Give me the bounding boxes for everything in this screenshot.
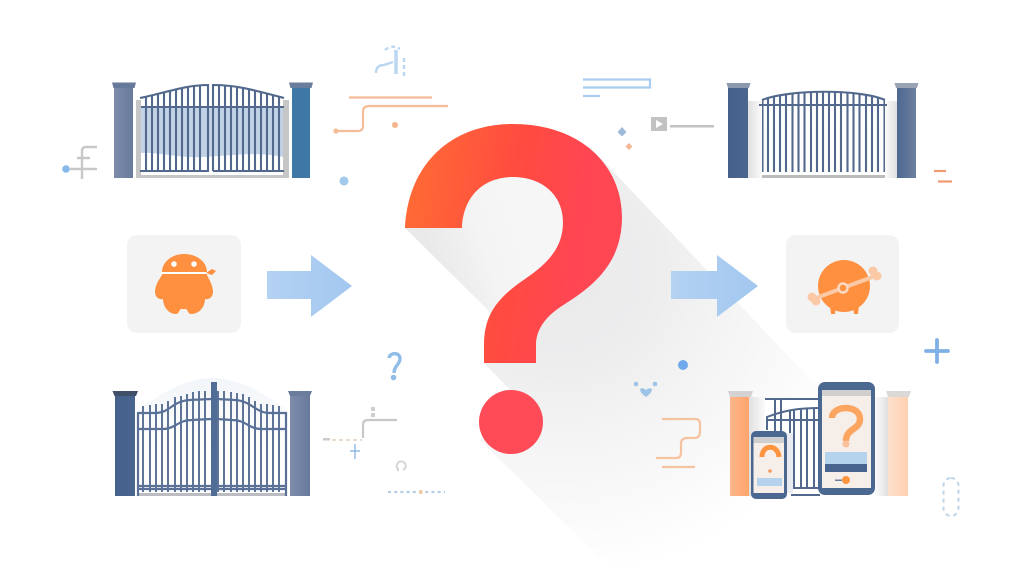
decoration: small grey ring — [397, 461, 406, 471]
panel: left robot icon — [127, 235, 241, 333]
arrow left — [267, 255, 352, 317]
gate top right — [726, 83, 918, 178]
arrow right — [671, 255, 758, 317]
infographic canvas — [62, 46, 960, 517]
decoration: orange dashes — [934, 171, 952, 182]
icon: large phone — [818, 382, 875, 495]
decoration: orange circuit lines — [334, 98, 448, 132]
icon: small phone — [751, 431, 787, 499]
panel: right lock icon — [786, 235, 899, 333]
decoration: orange path right — [656, 419, 700, 467]
decoration: dashed blue glyph — [376, 47, 404, 76]
icon: small blue question mark — [389, 354, 400, 380]
decoration: dotted row — [388, 490, 445, 494]
long shadow of question mark — [405, 130, 830, 573]
icon: orange dial — [808, 260, 882, 314]
decoration: blue dot — [340, 176, 348, 186]
decoration: grey f-shaped lines with dot — [62, 147, 97, 179]
gate top left — [112, 80, 313, 178]
decoration: blue dot right — [678, 360, 688, 370]
decoration: blue plus — [926, 340, 948, 362]
big question mark — [405, 124, 622, 454]
decoration: grey circuit lower — [323, 407, 397, 459]
gate bottom right with phones — [728, 382, 911, 499]
icon: orange robot — [155, 254, 216, 314]
gate bottom left — [112, 378, 312, 496]
decoration: smiley dots and heart — [634, 382, 657, 397]
decoration: blue text box lines — [583, 80, 650, 96]
icon: play box with line — [651, 117, 714, 131]
decoration: diamonds — [618, 127, 632, 150]
decoration: dashed oval — [944, 478, 958, 516]
